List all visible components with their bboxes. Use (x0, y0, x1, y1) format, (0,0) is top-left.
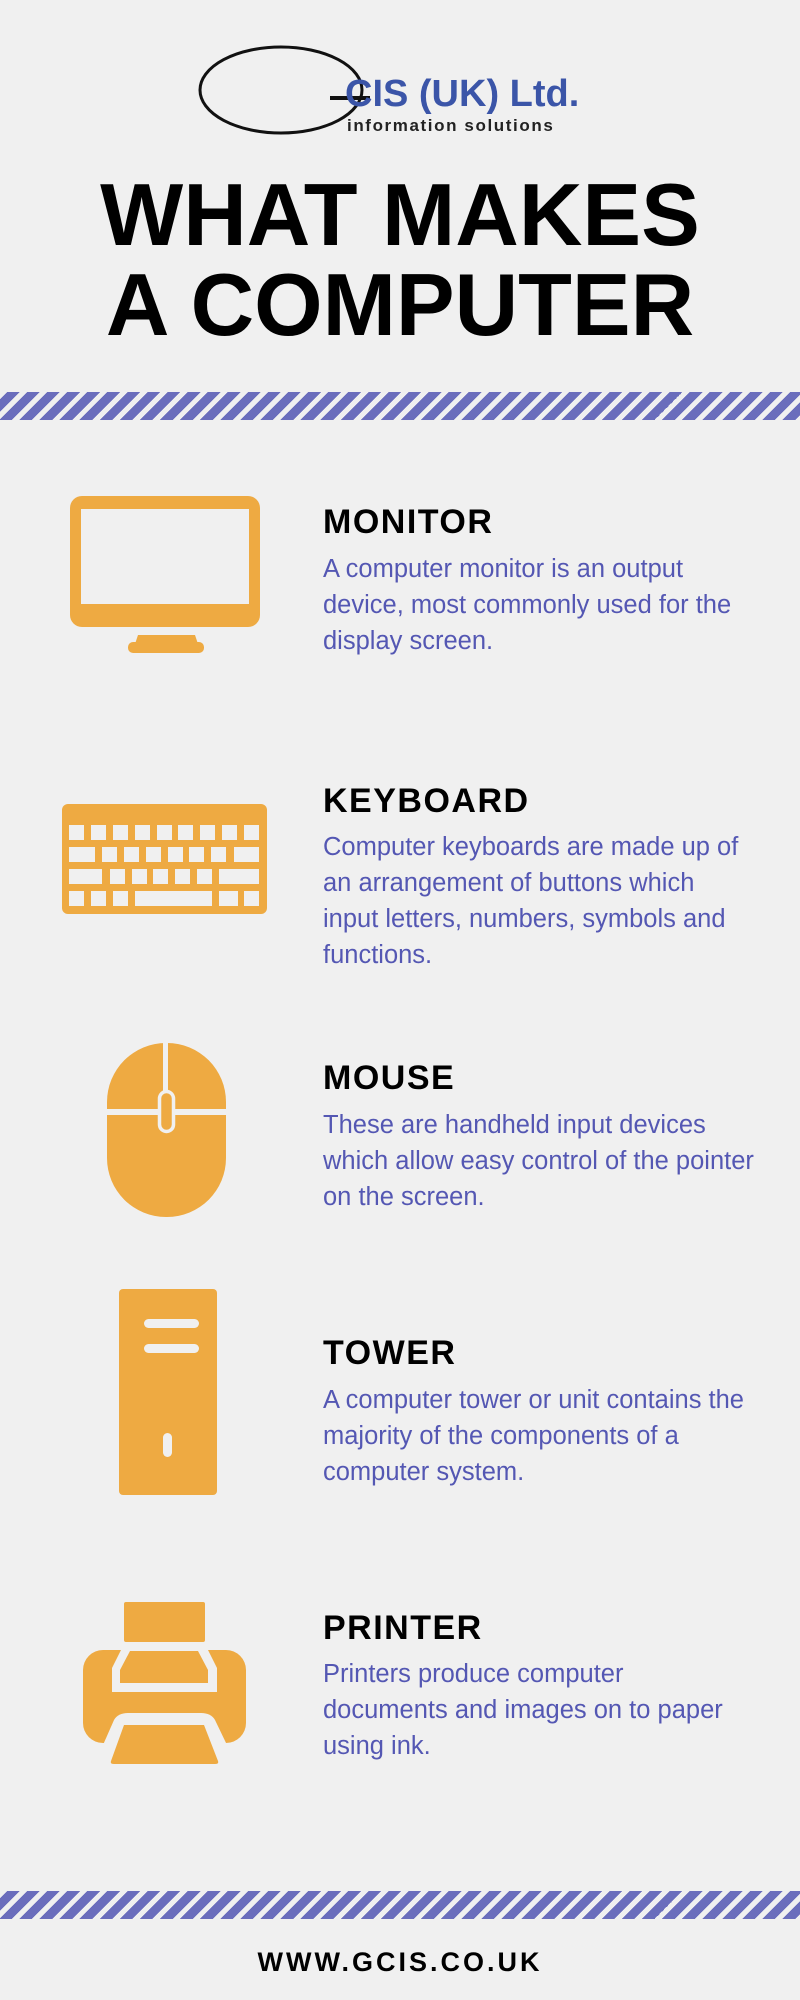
text: monitor: A computer monitor is an output (323, 555, 683, 583)
logo: CIS (UK) Ltd. (345, 73, 579, 115)
icon: tower (119, 1289, 217, 1495)
text: keyboard: functions. (323, 941, 432, 969)
title (100, 165, 700, 354)
text: tower: computer system. (323, 1458, 524, 1486)
heading: keyboard: KEYBOARD (323, 782, 530, 820)
text: printer (323, 1660, 723, 1760)
text: tower: A computer tower or unit contains the (323, 1386, 744, 1414)
text: keyboard (323, 833, 738, 969)
text: mouse: on the screen. (323, 1183, 485, 1211)
heading: tower: TOWER (323, 1334, 456, 1372)
text: monitor: device, most commonly used for the (323, 591, 731, 619)
text: mouse: which allow easy control of the pointer (323, 1147, 754, 1175)
text: mouse (323, 1111, 754, 1211)
text: mouse: These are handheld input devices (323, 1111, 706, 1139)
text: tower (323, 1386, 744, 1486)
icon: monitor (70, 496, 260, 653)
heading: printer: PRINTER (323, 1609, 483, 1647)
title: A COMPUTER (106, 255, 694, 354)
heading: mouse: MOUSE (323, 1059, 455, 1097)
logo: information solutions (347, 116, 554, 135)
logo (198, 46, 579, 135)
icon: printer (83, 1602, 246, 1764)
icon: keyboard (62, 804, 267, 914)
text: monitor: display screen. (323, 627, 493, 655)
text: tower: majority of the components of a (323, 1422, 679, 1450)
heading: monitor: MONITOR (323, 503, 493, 541)
footer url: WWW.GCIS.CO.UK (258, 1947, 542, 1977)
text: keyboard: an arrangement of buttons which (323, 869, 694, 897)
icon: mouse (107, 1043, 226, 1217)
text: keyboard: input letters, numbers, symbols and (323, 905, 726, 933)
text: monitor (323, 555, 731, 655)
text: printer: documents and images on to paper (323, 1696, 723, 1724)
text: printer: using ink. (323, 1732, 431, 1760)
title: WHAT MAKES (100, 165, 700, 264)
text: printer: Printers produce computer (323, 1660, 623, 1688)
text: keyboard: Computer keyboards are made up of (323, 833, 738, 861)
